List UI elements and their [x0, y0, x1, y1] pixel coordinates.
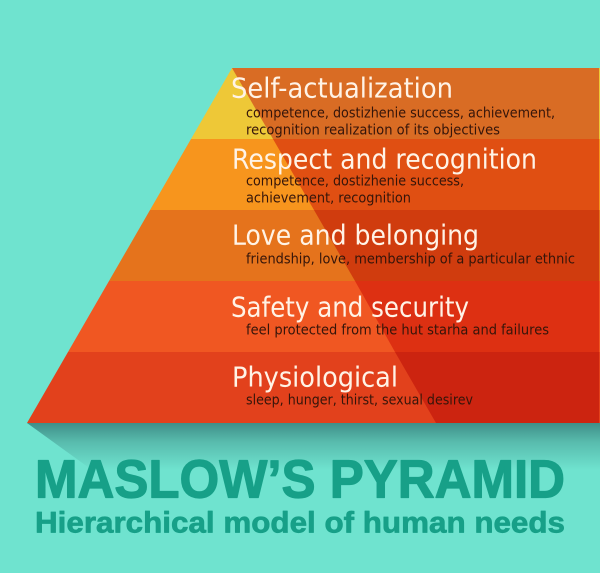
heading: safety and security: Safety and security	[231, 290, 469, 324]
heading: respect and recognition: Respect and recognition	[232, 142, 537, 176]
level 5 right shade	[232, 68, 599, 139]
text: respect details: competence, dostizhenie success,	[246, 174, 464, 190]
level 1 right shade	[395, 352, 599, 423]
level 2 right shade	[355, 281, 599, 352]
text: physiological details: sleep, hunger, thirst, sexual desirev	[246, 392, 473, 408]
text: respect details: achievement, recognition	[246, 190, 411, 206]
title: MASLOW’S PYRAMID	[35, 450, 565, 510]
pyramid	[27, 68, 600, 423]
heading: physiological: Physiological	[232, 360, 398, 394]
level 1 left: physiological	[27, 352, 600, 423]
level 3 right shade	[314, 210, 599, 281]
level 3 left: love	[109, 210, 600, 281]
text: self-actualization details: recognition realization of its objectives	[246, 122, 500, 138]
text: respect details	[246, 174, 464, 206]
text: self-actualization details: competence, dostizhenie success, achievement,	[246, 106, 555, 122]
level 4 right shade	[273, 139, 599, 210]
text: self-actualization details	[246, 106, 555, 138]
level 2 left: safety	[68, 281, 600, 352]
heading: love and belonging: Love and belonging	[232, 218, 479, 252]
text: safety details: feel protected from the hut starha and failures	[246, 322, 549, 338]
heading: self-actualization: Self-actualization	[231, 72, 453, 104]
level 5 left: self-actualization	[191, 68, 600, 139]
subtitle: Hierarchical model of human needs	[35, 506, 565, 540]
level 4 left: respect	[150, 139, 600, 210]
text: love details: friendship, love, membership of a particular ethnic	[246, 252, 575, 268]
pyramid shadow	[27, 423, 600, 470]
